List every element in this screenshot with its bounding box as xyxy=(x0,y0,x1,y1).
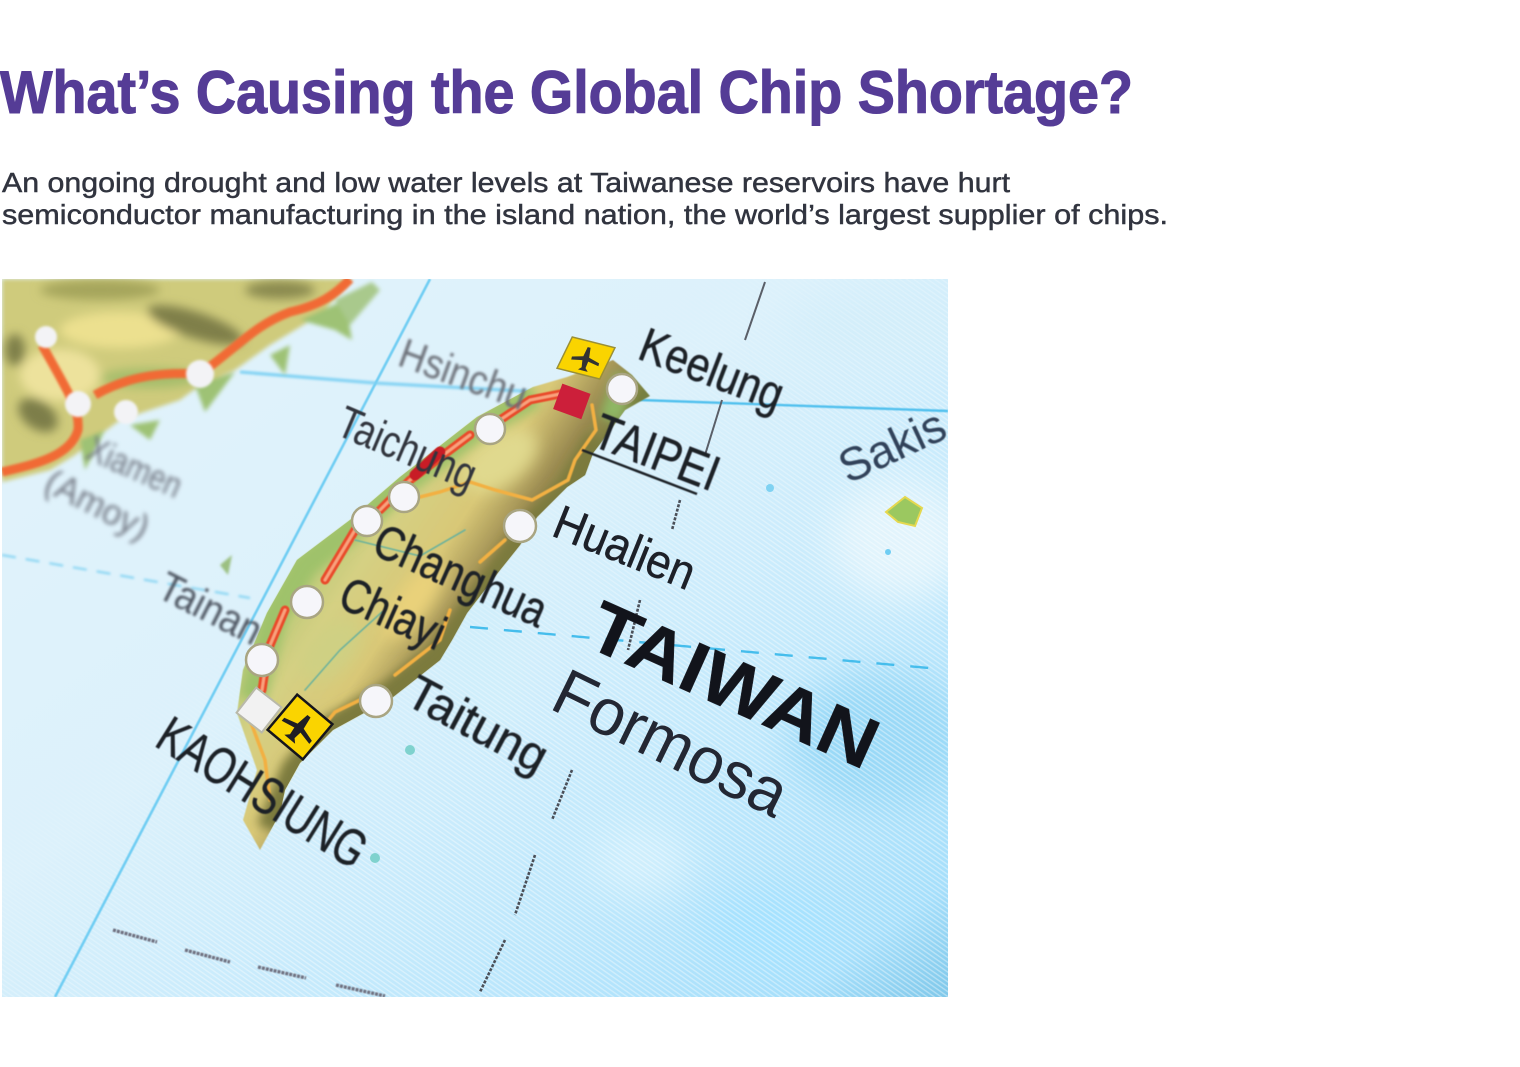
icon: Kaohsiung airport xyxy=(268,695,332,759)
sea background xyxy=(2,279,970,997)
label: Formosa: Formosa xyxy=(542,654,801,831)
label: Taitung: Taitung xyxy=(398,666,557,784)
label: Taipei: TAIPEI xyxy=(586,403,727,502)
icon: Taipei airport xyxy=(557,335,615,381)
label: Tainan: Tainan xyxy=(151,562,270,654)
Taipei capital marker xyxy=(553,384,591,419)
grid lines and sea boundaries xyxy=(2,279,948,997)
label: Changhua: Changhua xyxy=(366,515,555,638)
label: Hsinchu: Hsinchu xyxy=(393,329,534,419)
small islands xyxy=(220,484,922,863)
label: Taichung: Taichung xyxy=(330,396,484,500)
map of Taiwan xyxy=(2,279,948,997)
roads xyxy=(250,393,596,800)
island of Taiwan xyxy=(237,335,650,850)
label: Kaohsiung: KAOHSIUNG xyxy=(147,706,378,880)
Kaohsiung marker xyxy=(237,688,281,732)
label: Hualien: Hualien xyxy=(546,496,703,601)
subtitle text: semiconductor manufacturing in the island nation, the world’s largest supplier of chips. xyxy=(2,199,1168,230)
label: Xiamen: Xiamen xyxy=(81,428,189,506)
blurred place labels xyxy=(38,329,534,654)
label: Amoy: (Amoy) xyxy=(38,461,157,548)
label: TAIWAN: TAIWAN xyxy=(576,587,890,785)
mainland China xyxy=(2,279,380,482)
label: Chiayi: Chiayi xyxy=(332,568,454,661)
label: Keelung: Keelung xyxy=(632,319,791,422)
sharp place labels xyxy=(147,319,954,880)
city markers xyxy=(246,374,637,717)
subtitle text xyxy=(2,167,1168,230)
subtitle text: An ongoing drought and low water levels at Taiwanese reservoirs have hurt xyxy=(2,167,1010,198)
